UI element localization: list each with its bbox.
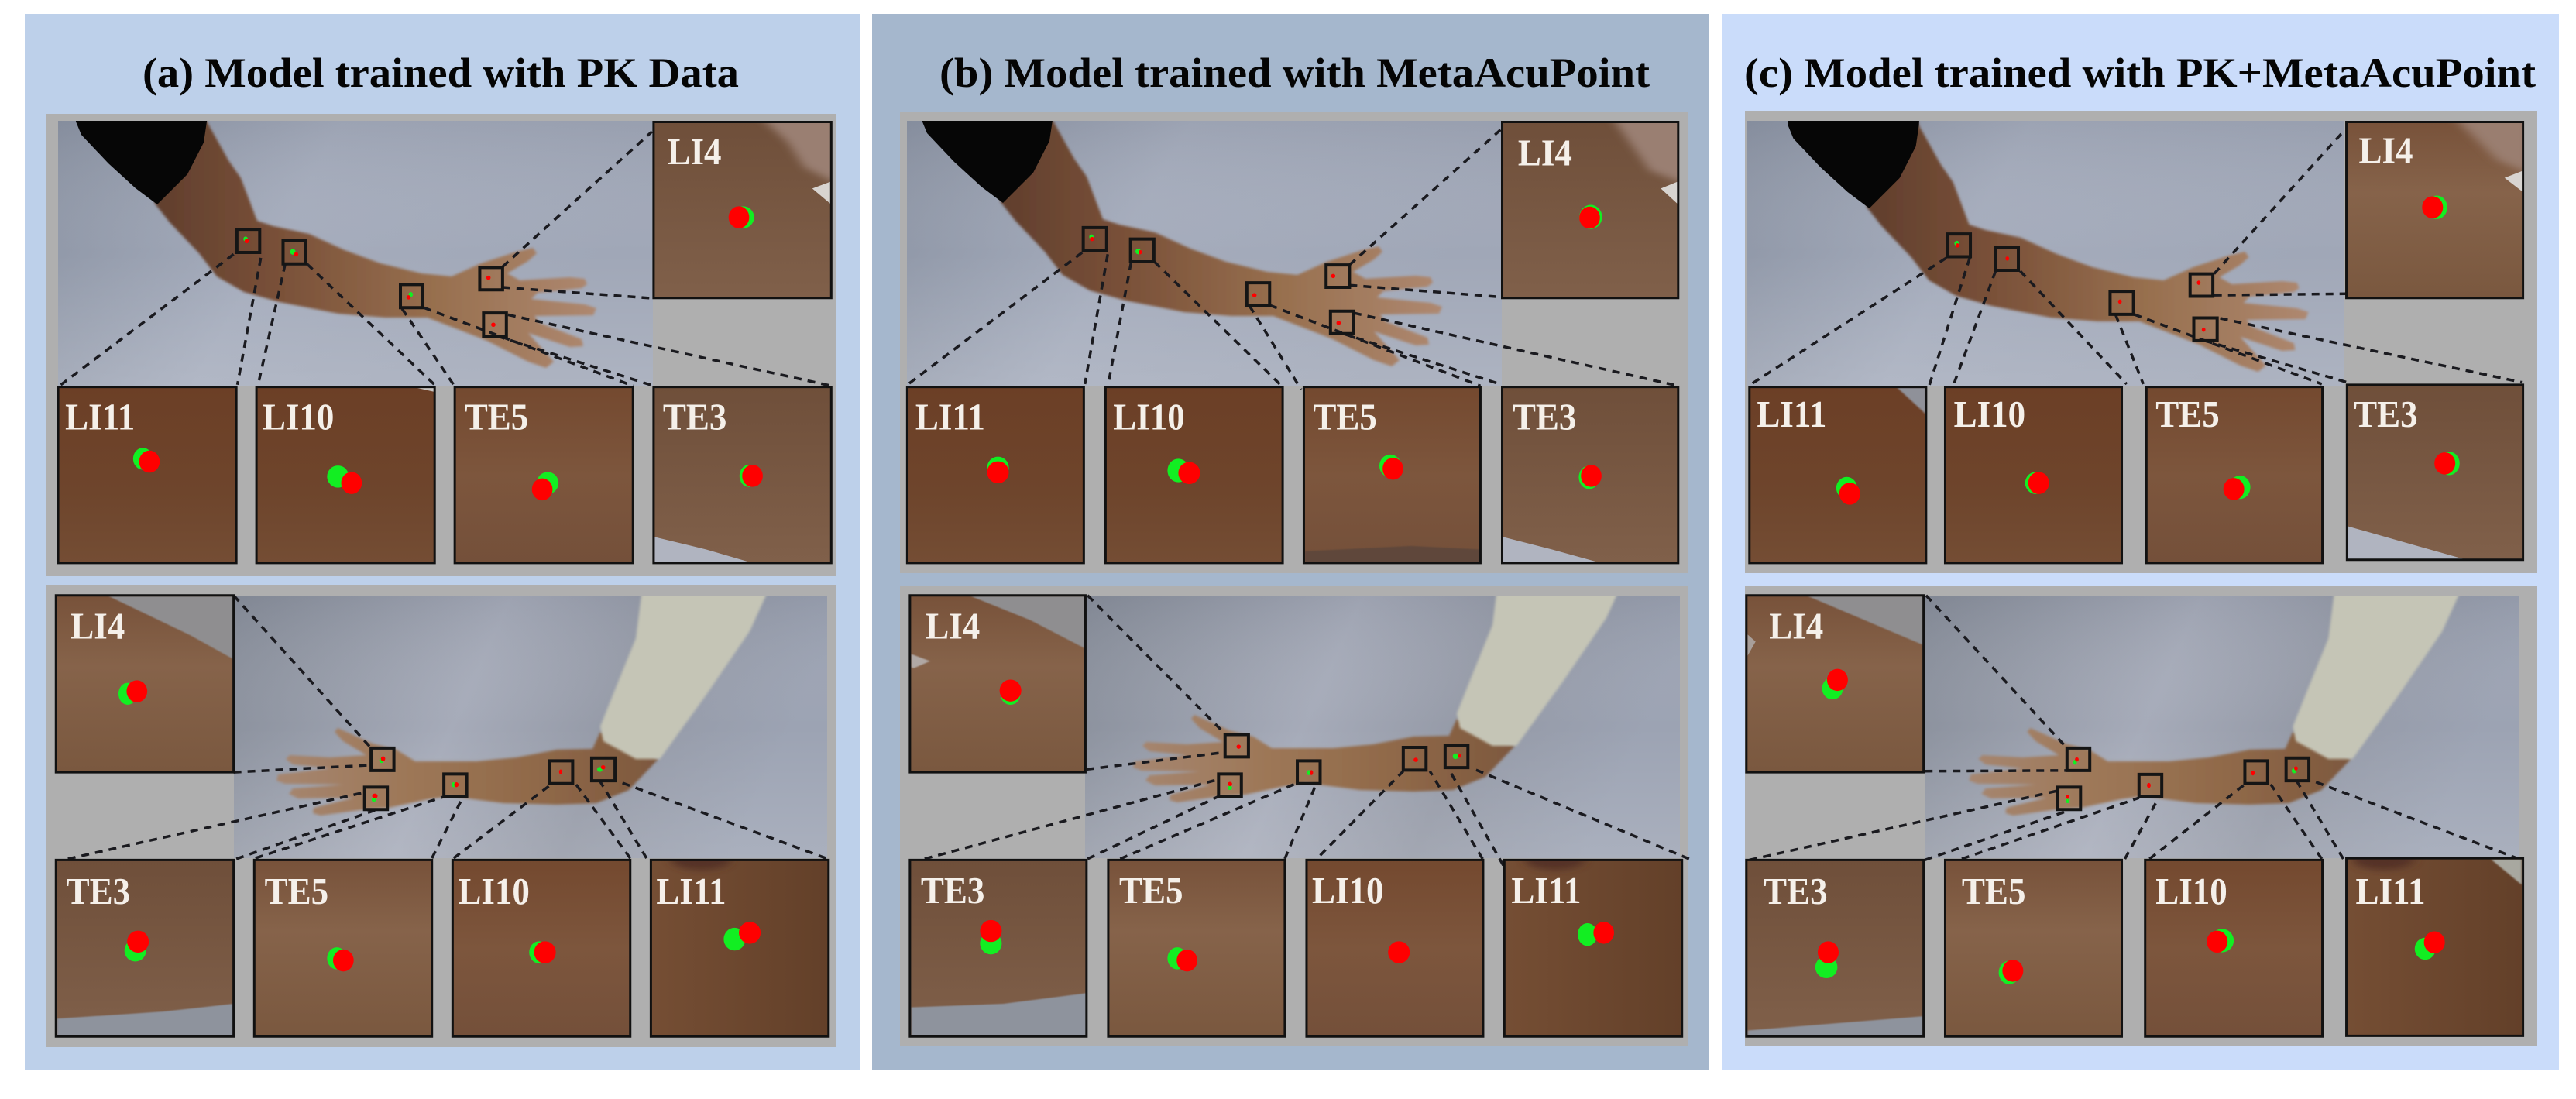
- dashed leader lines: [1751, 132, 2522, 386]
- photo: arm bottom row: [1085, 596, 1680, 858]
- inset: LI4: LI4: [926, 606, 980, 647]
- inset: LI10: [452, 860, 630, 1036]
- dashed leader lines: [925, 596, 1689, 865]
- inset: LI10: LI10: [1954, 394, 2025, 435]
- inset: LI10: LI10: [1113, 397, 1185, 438]
- row: top view frame: [1745, 111, 2537, 573]
- inset: TE3: TE3: [2354, 394, 2418, 435]
- inset: LI4: [2347, 118, 2531, 298]
- marker boxes on arm: [1084, 228, 1354, 334]
- inset: LI4: LI4: [70, 606, 125, 647]
- inset: LI11: LI11: [915, 397, 985, 438]
- inset: TE5: TE5: [1313, 397, 1377, 438]
- photo: arm top row: [907, 121, 1502, 386]
- inset: TE3: [910, 860, 1087, 1036]
- row: top view frame: [46, 114, 836, 576]
- inset: LI11: LI11: [1511, 870, 1581, 912]
- bottom row annotations and insets: [56, 596, 829, 1036]
- inset: LI10: LI10: [263, 397, 334, 438]
- title (a): (a) Model trained with PK Data: [143, 50, 739, 96]
- inset: LI4: LI4: [667, 132, 721, 173]
- inset: TE3: [56, 860, 234, 1036]
- marker boxes on arm: [2058, 748, 2309, 809]
- inset: TE3: TE3: [1513, 397, 1576, 438]
- inset: TE3: TE3: [921, 870, 984, 912]
- top row annotations and insets: [1750, 118, 2531, 563]
- inset: TE5: [2146, 387, 2323, 563]
- bottom row annotations and insets: [1747, 596, 2523, 1036]
- inset: TE5: [1303, 387, 1480, 563]
- inset: TE5: TE5: [1962, 871, 2025, 912]
- top row annotations and insets: [58, 118, 840, 563]
- photo: arm top row: [1747, 121, 2344, 386]
- bottom row annotations and insets: [910, 596, 1689, 1036]
- inset: LI10: LI10: [2155, 871, 2227, 912]
- inset: LI11: LI11: [1757, 394, 1826, 435]
- inset: LI10: LI10: [458, 871, 530, 912]
- inset: TE5: [455, 387, 633, 563]
- inset: TE5: [254, 860, 432, 1036]
- inset: TE5: TE5: [465, 397, 528, 438]
- inset: LI4: [1747, 596, 1924, 772]
- inset: TE5: TE5: [1119, 870, 1183, 912]
- panel: (c) Model trained with PK+MetaAcuPoint: [1722, 14, 2559, 1070]
- inset: LI4: [910, 596, 1085, 772]
- inset: LI11: [651, 850, 829, 1036]
- inset: LI10: [256, 387, 434, 563]
- inset: TE3: TE3: [663, 397, 726, 438]
- inset: LI11: [1750, 387, 1926, 563]
- panel: (a) Model trained with PK Data: [25, 14, 860, 1070]
- inset: LI10: [2145, 860, 2323, 1036]
- row: bottom view frame: [1745, 586, 2537, 1046]
- inset: LI11: [1504, 850, 1682, 1036]
- inset: LI10: [1105, 387, 1283, 563]
- marker boxes on arm: [237, 229, 507, 336]
- inset: LI11: [2347, 850, 2523, 1035]
- inset: TE5: [1945, 860, 2122, 1036]
- inset: TE3: [1747, 860, 1924, 1036]
- dashed leader lines: [908, 130, 1678, 390]
- inset: TE3: TE3: [1764, 871, 1828, 912]
- inset: LI11: LI11: [65, 397, 135, 438]
- inset: LI4: [654, 118, 840, 298]
- inset: LI4: LI4: [1769, 606, 1823, 647]
- inset: LI11: LI11: [2355, 871, 2425, 912]
- inset: TE3: [654, 387, 831, 563]
- inset: TE3: TE3: [67, 871, 130, 912]
- row: bottom view frame: [46, 585, 836, 1047]
- inset: LI4: LI4: [1518, 132, 1572, 174]
- inset: LI4: LI4: [2358, 130, 2413, 172]
- marker boxes on arm: [365, 748, 615, 809]
- photo: arm bottom row: [1925, 596, 2519, 858]
- marker boxes on arm: [1218, 735, 1468, 796]
- inset: LI11: LI11: [656, 871, 726, 912]
- inset: TE3: [2347, 385, 2523, 560]
- title (c): (c) Model trained with PK+MetaAcuPoint: [1744, 50, 2536, 96]
- inset: TE3: [1503, 387, 1678, 563]
- inset: LI10: [1307, 860, 1483, 1036]
- inset: LI11: [58, 387, 236, 563]
- inset: LI10: [1945, 387, 2122, 563]
- inset: TE5: [1108, 860, 1285, 1036]
- dashed leader lines: [61, 132, 831, 386]
- inset: LI11: [907, 387, 1084, 563]
- inset: LI4: [56, 596, 234, 772]
- panel: (b) Model trained with MetaAcuPoint: [872, 14, 1709, 1070]
- row: bottom view frame: [900, 586, 1688, 1046]
- dashed leader lines: [68, 596, 826, 859]
- row: top view frame: [900, 112, 1688, 573]
- inset: LI4: [1503, 118, 1688, 298]
- inset: LI10: LI10: [1312, 870, 1383, 912]
- dashed leader lines: [1750, 596, 2519, 860]
- inset: TE5: TE5: [265, 871, 328, 912]
- inset: TE5: TE5: [2155, 394, 2220, 435]
- photo: arm top row: [58, 121, 653, 386]
- photo: arm bottom row: [234, 596, 827, 858]
- top row annotations and insets: [907, 118, 1688, 563]
- marker boxes on arm: [1948, 234, 2217, 341]
- title (b): (b) Model trained with MetaAcuPoint: [939, 50, 1650, 96]
